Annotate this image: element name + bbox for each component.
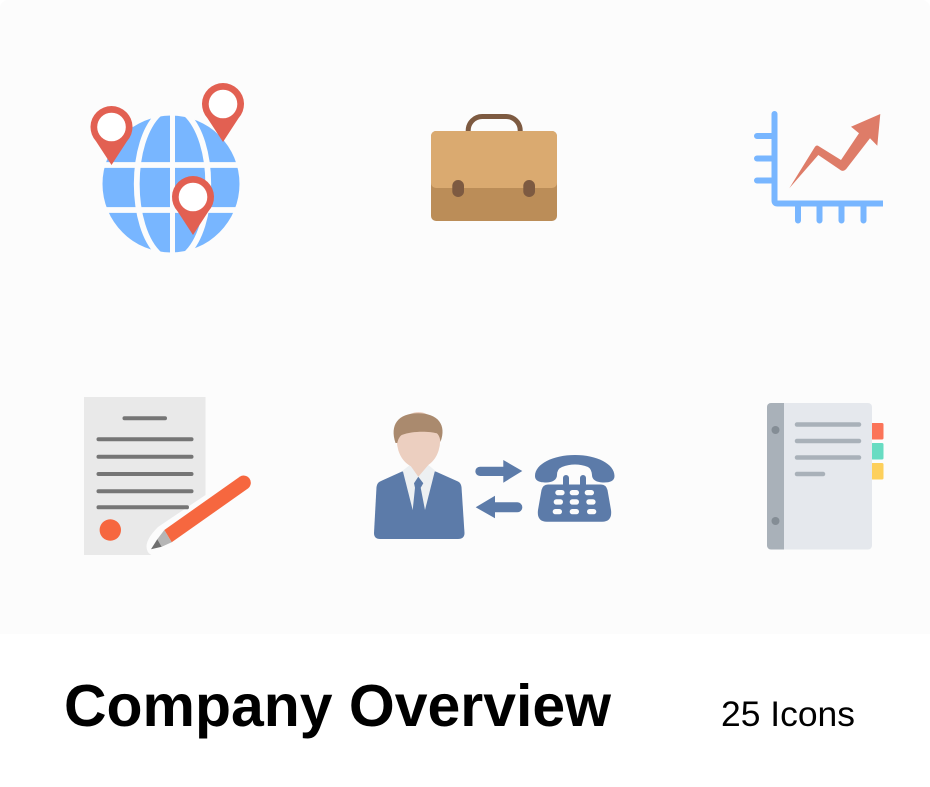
icon: globe with location pins bbox=[91, 83, 244, 256]
icon: briefcase bbox=[431, 116, 557, 221]
icon: binder notebook bbox=[767, 403, 884, 550]
spine bbox=[767, 403, 784, 550]
text lines bbox=[797, 424, 859, 474]
neck and face bbox=[410, 458, 428, 477]
index tabs bbox=[871, 423, 884, 480]
case lower bbox=[431, 131, 557, 221]
icon count label: 25 Icons bbox=[721, 695, 855, 734]
base bbox=[538, 475, 611, 522]
trend arrow bbox=[789, 114, 880, 188]
arrow left bbox=[476, 496, 522, 518]
title: Company Overview bbox=[64, 673, 611, 739]
axes and ticks bbox=[757, 114, 883, 220]
hair bbox=[394, 413, 443, 443]
cover bbox=[767, 403, 872, 550]
icon: person and telephone bbox=[374, 412, 614, 539]
keypad bbox=[553, 490, 596, 514]
text lines bbox=[98, 418, 192, 507]
pencil bbox=[151, 476, 251, 549]
seal bbox=[100, 519, 121, 541]
receiver bbox=[535, 455, 614, 482]
arrow right bbox=[475, 460, 522, 483]
paper bbox=[84, 397, 206, 555]
location pin top right bbox=[202, 83, 244, 142]
icon: growth chart bbox=[757, 114, 883, 220]
binder holes bbox=[772, 426, 780, 434]
clasps bbox=[452, 180, 535, 197]
location pin left bbox=[91, 106, 132, 165]
handle bbox=[468, 116, 520, 132]
shirt bbox=[403, 465, 435, 510]
icon: signed document bbox=[84, 397, 251, 555]
case upper bbox=[431, 131, 557, 188]
suit bbox=[374, 472, 464, 539]
tie bbox=[413, 477, 425, 510]
telephone bbox=[535, 455, 614, 522]
person bbox=[374, 412, 464, 539]
location pin bottom bbox=[172, 176, 214, 235]
globe bbox=[98, 112, 244, 256]
